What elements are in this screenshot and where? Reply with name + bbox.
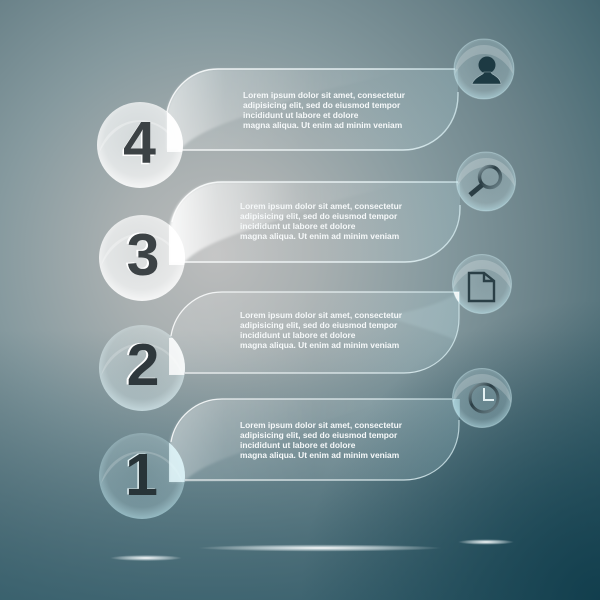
sheen 3 xyxy=(170,182,400,263)
body text 1: incididunt ut labore et dolore xyxy=(240,440,356,450)
body text 2: magna aliqua. Ut enim ad minim veniam xyxy=(240,340,399,350)
reflection 2 xyxy=(385,292,459,340)
icon: magnifier xyxy=(470,166,500,195)
icon: person xyxy=(472,56,501,84)
body text 1: Lorem ipsum dolor sit amet, consectetur xyxy=(240,420,403,430)
floor glow left xyxy=(110,555,182,561)
orb highlight search xyxy=(457,158,515,187)
digit 4: 4 xyxy=(122,112,155,178)
digit 2: 2 xyxy=(125,332,157,398)
outline 2 xyxy=(171,292,459,373)
overlap with panel 1 corner xyxy=(452,399,460,418)
overlap with panel 4 xyxy=(167,112,183,152)
icon orb: search xyxy=(456,152,516,211)
orb highlight clock xyxy=(453,374,511,403)
body text 4: Lorem ipsum dolor sit amet, consectetur xyxy=(243,90,406,100)
body text 1: magna aliqua. Ut enim ad minim veniam xyxy=(240,450,399,460)
overlap with panel 3 xyxy=(169,224,185,265)
body text 2: incididunt ut labore et dolore xyxy=(240,330,356,340)
digit 1: 1 xyxy=(124,442,156,508)
icon: document xyxy=(469,273,494,301)
digit 2: 2 xyxy=(127,332,159,398)
number orb 3 xyxy=(99,215,190,301)
icon orb: clock xyxy=(452,368,512,428)
body text 2: Lorem ipsum dolor sit amet, consectetur xyxy=(240,310,403,320)
number orb 4 xyxy=(97,102,190,188)
overlap with panel 2 corner xyxy=(454,292,459,302)
body text 1: adipisicing elit, sed do eiusmod tempor xyxy=(240,430,398,440)
glass body 4 xyxy=(167,69,458,150)
orb highlight user xyxy=(455,45,513,74)
step 1 panel xyxy=(170,399,459,482)
floor glow right xyxy=(458,539,514,545)
body text 3: adipisicing elit, sed do eiusmod tempor xyxy=(240,211,398,221)
floor glow centre xyxy=(198,544,442,552)
digit 1: 1 xyxy=(125,442,158,508)
outline 3 xyxy=(172,182,460,262)
icon orb: user xyxy=(454,39,514,99)
glass body 2 xyxy=(170,292,459,374)
body text 3: magna aliqua. Ut enim ad minim veniam xyxy=(240,231,399,241)
number orb 1 xyxy=(99,433,190,519)
body text 4: magna aliqua. Ut enim ad minim veniam xyxy=(243,120,402,130)
crescent highlight 2 xyxy=(101,343,183,376)
body text 2: adipisicing elit, sed do eiusmod tempor xyxy=(240,320,398,330)
sheen 4 xyxy=(167,69,400,150)
icon orb: document xyxy=(452,254,512,314)
body text 3: Lorem ipsum dolor sit amet, consectetur xyxy=(240,201,403,211)
body text 4: incididunt ut labore et dolore xyxy=(243,110,359,120)
step 3 panel xyxy=(170,182,460,263)
outline 4 xyxy=(167,69,458,150)
body text 3: incididunt ut labore et dolore xyxy=(240,221,356,231)
crescent highlight 1 xyxy=(101,451,183,484)
glass body 3 xyxy=(170,182,460,263)
crescent highlight 3 xyxy=(101,233,183,266)
overlap with panel 1 xyxy=(169,443,185,482)
icon: clock xyxy=(470,384,498,412)
orb highlight document xyxy=(453,260,511,289)
step 4 panel xyxy=(167,69,458,150)
body text 4: adipisicing elit, sed do eiusmod tempor xyxy=(243,100,401,110)
digit 3: 3 xyxy=(127,222,159,288)
digit 4: 4 xyxy=(123,110,156,176)
digit 3: 3 xyxy=(125,221,157,287)
outline 1 xyxy=(171,399,459,480)
glass body 1 xyxy=(170,399,459,482)
overlap with panel 2 xyxy=(169,338,185,375)
crescent highlight 4 xyxy=(99,120,181,153)
number orb 2 xyxy=(99,325,190,411)
step 2 panel xyxy=(170,292,459,374)
sheen 1 xyxy=(170,399,390,482)
